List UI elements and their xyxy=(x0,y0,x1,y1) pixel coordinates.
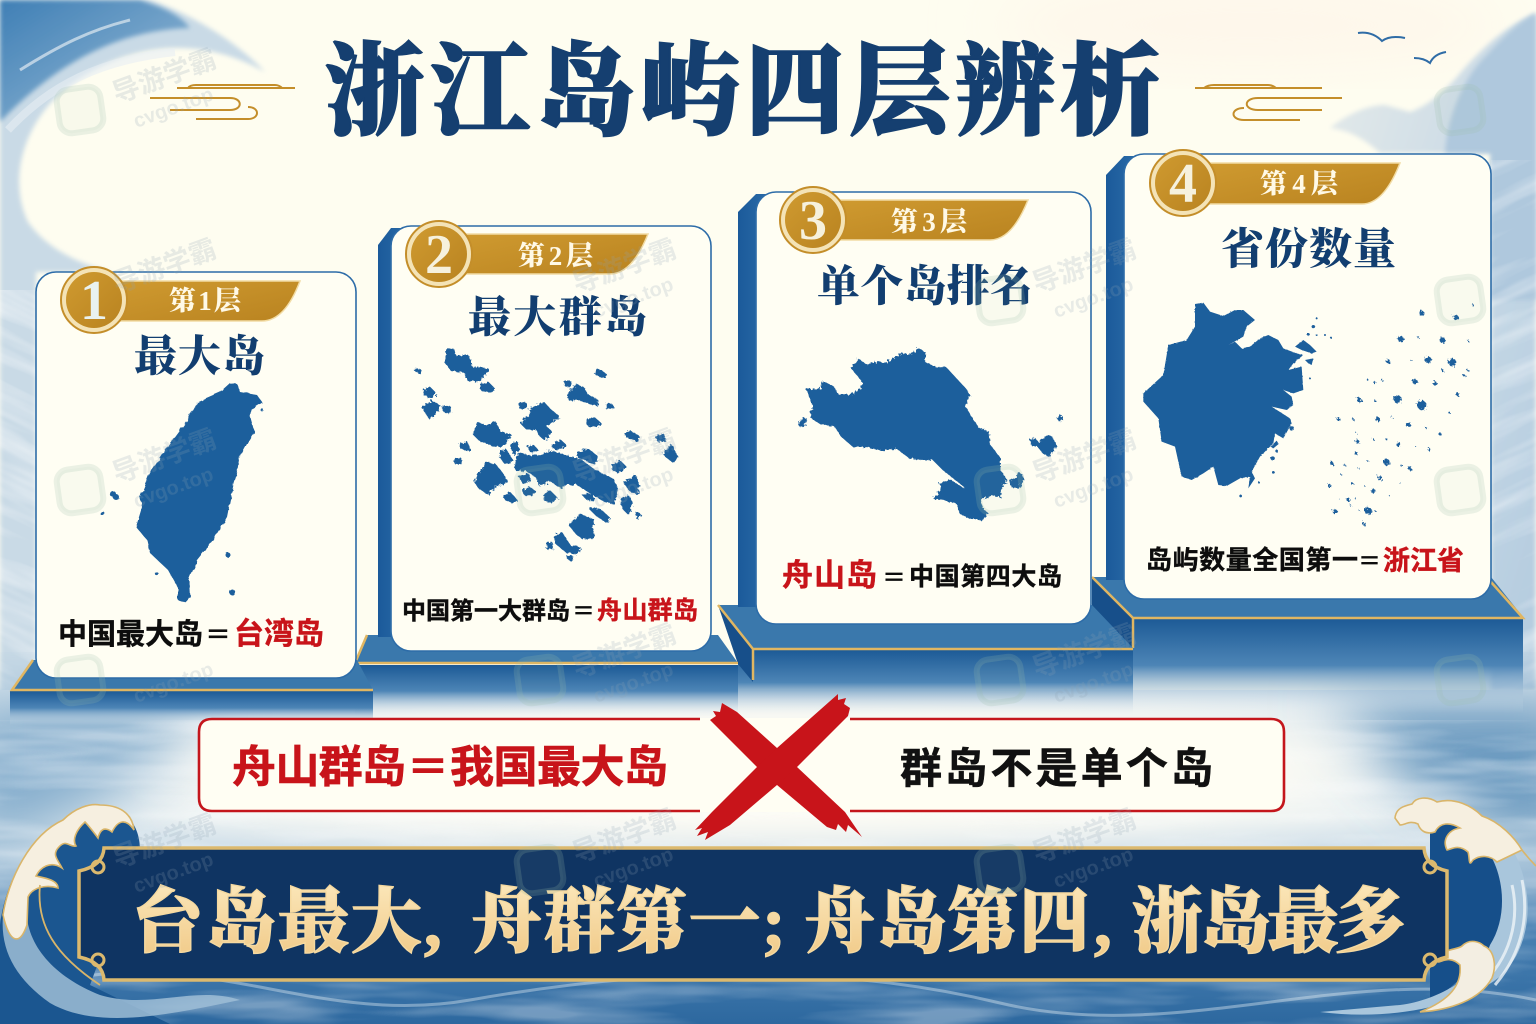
map: Zhoushan island xyxy=(798,348,1063,520)
watermark: 导游学霸 xyxy=(109,809,220,874)
equation: ＝ xyxy=(882,565,906,592)
watermark: cvgo.top xyxy=(591,273,676,323)
badge: layer 2 xyxy=(406,221,648,287)
step platform 3 xyxy=(718,194,1133,715)
equation xyxy=(1146,545,1464,576)
watermark: 导游学霸 xyxy=(569,804,680,869)
step platform 4 xyxy=(1092,156,1523,713)
badge: layer 1 xyxy=(61,267,300,333)
equation xyxy=(782,558,1062,593)
badge: layer 3 xyxy=(780,187,1028,253)
banner: mnemonic xyxy=(79,848,1447,980)
badge: layer 1: 1 xyxy=(80,270,108,332)
equation: 岛屿数量全国第一 xyxy=(1146,545,1358,575)
badge: layer 3: 3 xyxy=(799,190,827,252)
icon: birds xyxy=(1358,33,1446,63)
map: Taiwan xyxy=(101,383,263,603)
icon: gold cloud left of title xyxy=(150,85,295,119)
heading: 省份数量 xyxy=(1221,226,1396,274)
panel: layer 1 largest island xyxy=(36,267,356,678)
watermark: 导游学霸 xyxy=(109,234,220,299)
map: Zhoushan archipelago xyxy=(415,350,677,560)
watermark: 导游学霸 xyxy=(569,234,680,299)
watermark: cvgo.top xyxy=(1051,843,1136,893)
equation xyxy=(402,597,698,625)
watermark: 导游学霸 xyxy=(109,44,220,109)
step platform 1 xyxy=(10,660,373,725)
equation: ＝ xyxy=(572,598,595,624)
badge: layer 2: 2 xyxy=(425,224,453,286)
panel: layer 4 province count xyxy=(1124,150,1491,599)
bottom left wave xyxy=(0,805,240,1024)
title: 浙江岛屿四层辨析 xyxy=(325,37,1160,148)
banner text: , xyxy=(1094,884,1112,962)
badge: layer 4: 4 xyxy=(1169,153,1197,215)
banner text xyxy=(132,884,1406,962)
banner text: 浙岛最多 xyxy=(1132,884,1406,962)
equation: 中国第四大岛 xyxy=(909,563,1062,591)
watermark: cvgo.top xyxy=(131,463,216,513)
callout: misconception xyxy=(198,694,1285,840)
equation: ＝ xyxy=(1358,548,1381,574)
heading: 最大群岛 xyxy=(468,294,647,342)
equation: 浙江省 xyxy=(1383,546,1464,576)
banner text: ; xyxy=(762,884,786,962)
icon: red cross xyxy=(695,694,862,840)
watermark: 导游学霸 xyxy=(1029,234,1140,299)
equation: ＝ xyxy=(205,620,231,650)
equation: 中国第一大群岛 xyxy=(402,598,570,625)
bottom right wave xyxy=(1320,798,1536,1015)
panel: layer 3 single island rank xyxy=(756,187,1091,624)
map: Zhejiang province xyxy=(1143,303,1474,526)
step platform 2 xyxy=(355,228,738,717)
watermark: cvgo.top xyxy=(1051,273,1136,323)
badge: layer 4: 第4层 xyxy=(1260,169,1340,199)
correction: 群岛不是单个岛 xyxy=(900,745,1213,792)
badge: layer 1: 第1层 xyxy=(169,286,243,316)
watermark: cvgo.top xyxy=(591,843,676,893)
icon: gold cloud right of title xyxy=(1195,85,1342,120)
equation: 台湾岛 xyxy=(234,617,324,651)
watermark: cvgo.top xyxy=(131,658,216,708)
badge: layer 3: 第3层 xyxy=(891,207,969,237)
equation xyxy=(58,617,324,651)
watermark: 导游学霸 xyxy=(569,619,680,684)
banner text: , xyxy=(424,884,442,962)
badge: layer 4 xyxy=(1150,150,1400,216)
watermark: 导游学霸 xyxy=(1029,804,1140,869)
heading: 单个岛排名 xyxy=(817,263,1033,311)
watermark: cvgo.top xyxy=(591,463,676,513)
banner text: 舟岛第四 xyxy=(804,884,1090,962)
banner text: 舟群第一 xyxy=(471,884,760,962)
banner text: 台岛最大 xyxy=(132,884,422,962)
heading: 最大岛 xyxy=(134,333,265,381)
watermark: cvgo.top xyxy=(1051,463,1136,513)
equation: 中国最大岛 xyxy=(58,618,203,651)
watermark: 导游学霸 xyxy=(109,424,220,489)
watermark: 导游学霸 xyxy=(1029,619,1140,684)
wrong statement: 我国最大岛 xyxy=(450,743,668,792)
watermark: 导游学霸 xyxy=(569,424,680,489)
wrong statement: 舟山群岛 xyxy=(232,743,406,792)
equation: 舟山群岛 xyxy=(597,597,698,625)
scatter islands xyxy=(1328,304,1474,526)
panel: layer 2 largest archipelago xyxy=(391,221,711,651)
watermark: cvgo.top xyxy=(131,83,216,133)
wrong statement: ＝ xyxy=(407,744,449,791)
watermark xyxy=(55,44,1485,901)
equation: 舟山岛 xyxy=(782,558,877,593)
watermark: cvgo.top xyxy=(1051,658,1136,708)
watermark: 导游学霸 xyxy=(1029,424,1140,489)
wrong statement xyxy=(232,743,668,792)
watermark: cvgo.top xyxy=(131,848,216,898)
watermark: cvgo.top xyxy=(591,658,676,708)
badge: layer 2: 第2层 xyxy=(518,241,595,271)
